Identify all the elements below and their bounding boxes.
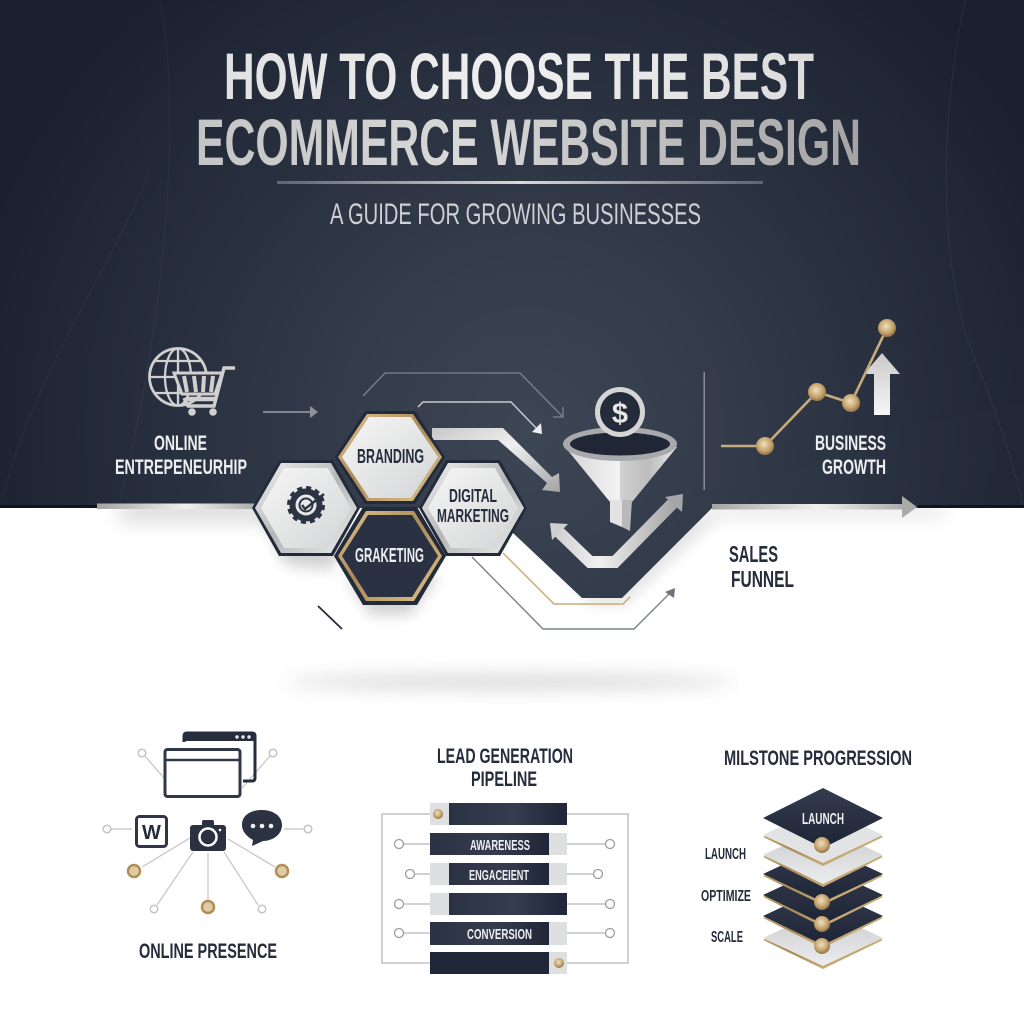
arrow: two-way V arrow under funnel <box>550 494 683 562</box>
arrow: thin to hexagons <box>263 406 318 418</box>
arrow: thin white second <box>418 402 542 434</box>
labels: stages: LAUNCH <box>705 846 746 863</box>
bar row 1 <box>430 803 567 825</box>
panel: dark header background <box>0 0 1024 605</box>
hexagon: graketing: GRAKETING <box>355 545 424 567</box>
hexagon: graketing <box>334 507 446 615</box>
subtitle: A GUIDE FOR GROWING BUSINESSES <box>330 198 701 231</box>
bar row 4 <box>430 893 567 915</box>
panel: online presence <box>103 733 312 963</box>
labels: stages <box>701 846 751 946</box>
chart: business growth line <box>721 319 900 455</box>
arrow: grey line <box>472 557 675 629</box>
label: online entrepreneurship: ONLINE <box>154 432 207 455</box>
arrow: thin outline upper <box>363 373 563 417</box>
silver baseline left <box>97 504 257 509</box>
hexagon: digital marketing: MARKETING <box>437 505 509 526</box>
label: business growth <box>815 432 886 479</box>
label: business growth: BUSINESS <box>815 432 886 455</box>
label: launch on top layer: LAUNCH <box>802 811 844 828</box>
label: business growth: GROWTH <box>822 456 886 479</box>
arrow: thick silver into funnel <box>432 428 560 492</box>
labels: stages: SCALE <box>711 929 743 946</box>
connector lines <box>111 756 304 905</box>
bar row 2: awareness: AWARENESS <box>470 837 530 854</box>
bar row 5: conversion: CONVERSION <box>467 926 532 943</box>
stacked layers <box>763 788 883 969</box>
heading: milestone progression: MILSTONE PROGRESSION <box>724 746 912 770</box>
label: online entrepreneurship: ENTREPENEURHIP <box>115 456 247 479</box>
icon: W box <box>136 816 166 846</box>
arrow: silver baseline right <box>712 496 917 518</box>
hexagon: branding: BRANDING <box>357 446 424 468</box>
hexagon: branding <box>335 411 445 504</box>
bar row 2: awareness <box>430 833 567 855</box>
bar row 3: engagement: ENGACEIENT <box>469 867 529 884</box>
label: sales funnel: FUNNEL <box>731 566 794 592</box>
frame connectors <box>382 814 628 963</box>
label: sales funnel: SALES <box>729 541 778 567</box>
label: sales funnel <box>729 541 794 592</box>
bar row 3: engagement <box>430 863 567 885</box>
bar row 6 <box>430 952 567 974</box>
icon: funnel with dollar coin <box>563 387 677 531</box>
icon: dollar coin <box>595 387 645 437</box>
panel: lead generation pipeline <box>382 745 628 974</box>
divider vertical <box>704 372 705 490</box>
title <box>196 39 861 179</box>
labels: stages: OPTIMIZE <box>701 888 751 905</box>
hexagon: digital marketing: DIGITAL <box>449 485 497 506</box>
bar row 5: conversion <box>430 922 567 945</box>
nodes: network endpoints <box>103 749 312 913</box>
icon: front browser window <box>165 750 240 796</box>
hexagon: gear <box>252 460 360 570</box>
icon: gear target <box>289 488 324 522</box>
label: online presence: ONLINE PRESENCE <box>139 940 277 963</box>
icon: speech bubble <box>242 810 282 846</box>
heading: lead generation pipeline <box>437 745 573 791</box>
nodes: pipeline <box>394 840 614 938</box>
icon: W box: W <box>142 822 161 844</box>
icon: back browser window <box>184 733 255 781</box>
heading: lead generation pipeline: PIPELINE <box>471 768 537 791</box>
connector: gold line <box>503 553 630 604</box>
decorative stroke mark <box>318 606 342 629</box>
panel: milestone progression <box>701 746 912 969</box>
ground shadow <box>285 676 735 688</box>
heading: lead generation pipeline: LEAD GENERATION <box>437 745 573 768</box>
label: online entrepreneurship <box>115 432 247 479</box>
icon: camera <box>190 820 226 851</box>
icon: globe with shopping cart <box>150 348 235 416</box>
hexagon: digital marketing <box>419 460 527 556</box>
arrow: growth up arrow <box>864 353 900 415</box>
icon: dollar coin: $ <box>612 398 628 430</box>
